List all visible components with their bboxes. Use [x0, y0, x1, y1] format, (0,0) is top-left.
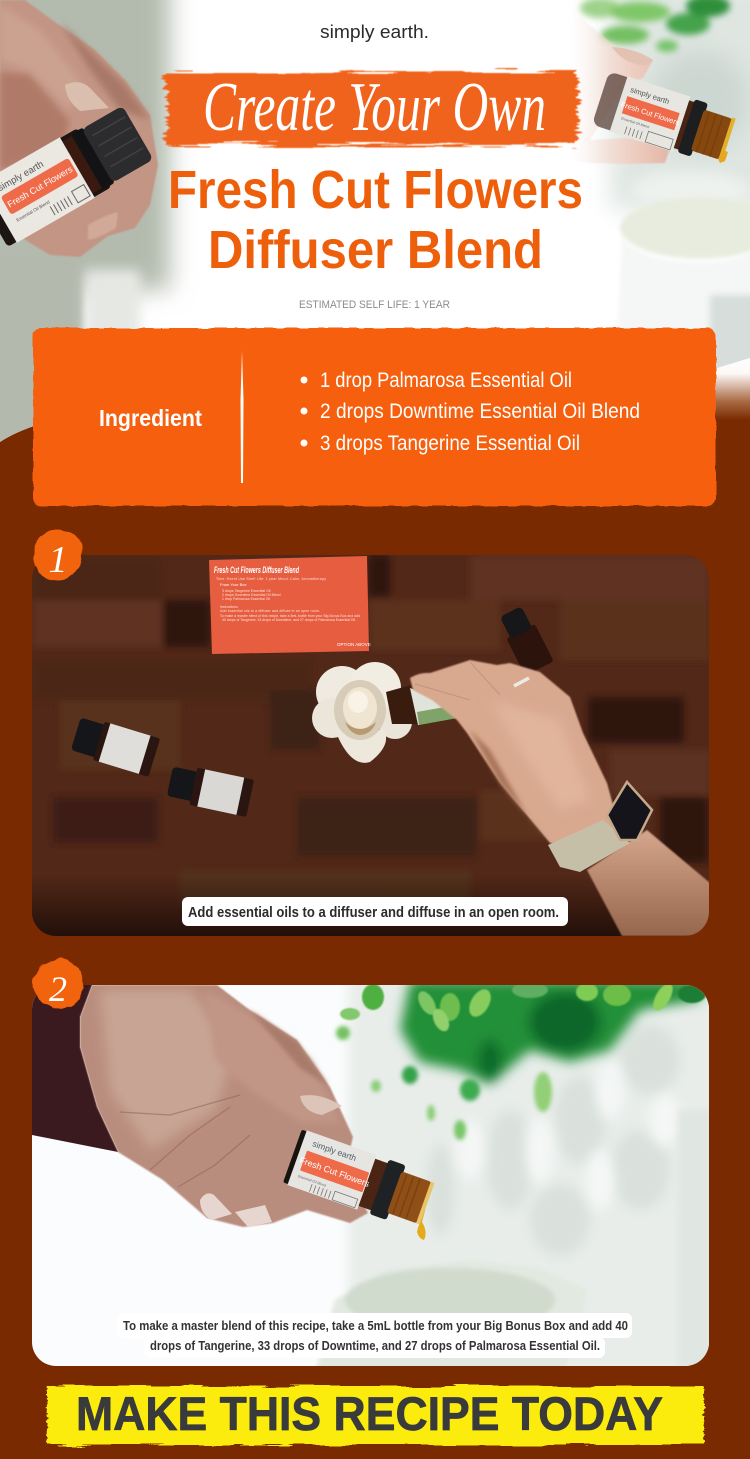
recipe card: From Your Box	[220, 582, 246, 587]
recipe card: Add essential oils to a diffuser and diffuse in an open room.	[220, 609, 320, 613]
ingredient list: 2 drops Downtime Essential Oil Blend	[320, 400, 640, 423]
recipe card: 1 drop Palmarosa Essential Oil	[222, 597, 270, 601]
divider	[240, 350, 244, 483]
panel: step 2 photo	[32, 975, 728, 1380]
bottle: Fresh Cut Flowers	[298, 1155, 371, 1189]
title: Fresh Cut Flowers	[168, 160, 583, 220]
logo: simply earth.	[320, 22, 429, 42]
caption: step 1: Add essential oils to a diffuser and diffuse in an open room.	[188, 904, 559, 921]
bottle: simply earth	[311, 1138, 358, 1163]
bottle	[0, 102, 155, 248]
recipe card: 2 drops Downtime Essential Oil Blend	[222, 593, 281, 597]
recipe card: 3 drops Tangerine Essential Oil	[222, 589, 271, 593]
leaves	[580, 0, 730, 52]
oil drip	[417, 1207, 426, 1240]
recipe card	[209, 556, 371, 654]
bottle	[283, 1129, 437, 1231]
caption: step 2	[117, 1313, 632, 1358]
call to action banner: MAKE THIS RECIPE TODAY	[76, 1387, 663, 1440]
banner: create your own	[166, 69, 578, 146]
caption: step 2: drops of Tangerine, 33 drops of Downtime, and 27 drops of Palmarosa Essential Oil.	[150, 1338, 600, 1353]
recipe card: 40 drops of Tangerine, 33 drops of Downtime, and 27 drops of Palmarosa Essential Oil.	[222, 618, 356, 622]
bottle: simply earth	[629, 85, 671, 106]
badge: step 2: 2	[49, 969, 67, 1009]
caption: step 2: To make a master blend of this recipe, take a 5mL bottle from your Big Bonus Box and add 40	[123, 1318, 628, 1333]
ingredient list: 1 drop Palmarosa Essential Oil	[320, 369, 572, 392]
bottle left	[70, 715, 160, 777]
badge: step 1: 1	[48, 539, 68, 581]
panel background	[33, 328, 716, 506]
oil drip	[718, 150, 728, 163]
recipe card: Instructions	[220, 605, 238, 609]
bottle	[592, 70, 738, 167]
badge: step 1	[33, 530, 83, 581]
green leaves	[336, 980, 706, 1140]
recipe card: To make a master blend of this recipe, take a 5mL bottle from your Big Bonus Box and add	[220, 614, 360, 618]
right hand pouring bottle	[570, 8, 738, 167]
dark bottle	[502, 608, 553, 671]
bottle: Fresh Cut Flowers	[620, 100, 681, 127]
recipe card: OPTION ABOVE	[337, 642, 371, 647]
ring	[514, 678, 529, 686]
header photo background	[0, 0, 750, 450]
bottle: Essential Oil Blend	[297, 1174, 326, 1188]
title: Diffuser Blend	[208, 220, 543, 280]
hand	[80, 985, 368, 1227]
script heading: Create Your Own	[203, 69, 546, 146]
panel: step 1 photo	[32, 555, 710, 936]
ceramic cup	[316, 1260, 587, 1370]
ceramic flower	[312, 662, 412, 763]
recipe card: Fresh Cut Flowers Diffuser Blend	[214, 565, 299, 575]
recipe card: Time: Event Use Shelf Life: 1 year Mood: Calm, Aromatherapy	[216, 577, 326, 581]
ingredient list: 3 drops Tangerine Essential Oil	[320, 432, 580, 455]
held bottle	[386, 685, 457, 725]
shelf life note: ESTIMATED SELF LIFE: 1 YEAR	[299, 299, 450, 311]
wood table	[32, 555, 710, 936]
sleeve	[32, 985, 118, 1152]
photo background	[32, 975, 728, 1380]
panel: ingredients	[33, 328, 716, 506]
brush stroke	[166, 72, 578, 145]
bottle: Essential Oil Blend	[15, 199, 51, 223]
watch	[548, 782, 652, 872]
hand	[0, 0, 158, 257]
bottle: Fresh Cut Flowers	[6, 164, 75, 209]
bottle right	[168, 767, 254, 816]
title	[168, 160, 583, 280]
badge: step 2	[33, 959, 83, 1009]
hand	[570, 8, 670, 164]
hand and arm	[410, 660, 710, 936]
bottle: Essential Oil Blend	[621, 116, 650, 129]
left hand holding bottle	[0, 0, 158, 257]
ingredient list	[300, 369, 640, 455]
caption: step 1	[182, 897, 568, 926]
ingredient label: Ingredient	[99, 405, 202, 431]
